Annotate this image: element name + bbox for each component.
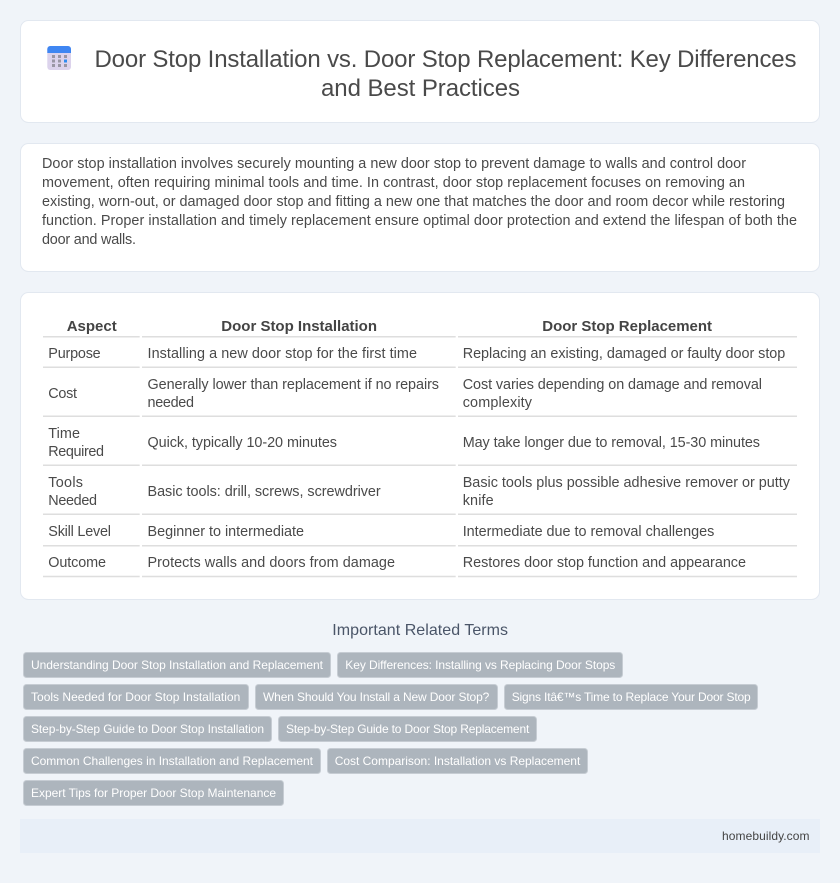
text block: intro: door and walls. (42, 232, 136, 248)
tag: Cost Comparison: Installation vs Replacement (335, 754, 581, 768)
table row: skill level: Skill Level (48, 524, 111, 540)
table row: time required: Time (48, 426, 80, 442)
heading: important related terms: Important Related Terms (332, 622, 508, 639)
table row: outcome: Protects walls and doors from damage (148, 555, 395, 571)
tag (24, 716, 272, 742)
tag: Signs Itâ€™s Time to Replace Your Door Stop (512, 690, 751, 704)
table row: outcome: Outcome (48, 555, 106, 571)
tag (24, 748, 320, 774)
tag: Key Differences: Installing vs Replacing Door Stops (345, 658, 615, 672)
tag (328, 748, 588, 774)
tag (256, 684, 498, 710)
tag (24, 780, 284, 806)
text block: intro (42, 156, 797, 248)
table row: tools needed: Basic tools plus possible adhesive remover or putty (463, 475, 791, 491)
text block: intro: existing, worn-out, or damaged door stop and fitting a new one that matches the door and room decor while restoring (42, 194, 785, 210)
table row: cost: Cost (48, 386, 77, 402)
tag (504, 684, 758, 710)
title (94, 46, 796, 102)
tag: When Should You Install a New Door Stop? (263, 690, 490, 704)
table row: outcome (48, 555, 746, 571)
table row: time required: May take longer due to removal, 15-30 minutes (463, 435, 760, 451)
table row: purpose (48, 346, 785, 362)
tag: Step-by-Step Guide to Door Stop Replacement (286, 722, 530, 736)
table row: outcome: Restores door stop function and appearance (463, 555, 746, 571)
table row: purpose: Installing a new door stop for the first time (148, 346, 417, 362)
tag: Tools Needed for Door Stop Installation (31, 690, 240, 704)
title: and Best Practices (321, 75, 520, 102)
table row: tools needed: Tools (48, 475, 83, 491)
table row: tools needed: Basic tools: drill, screws, screwdriver (148, 484, 381, 500)
table row: tools needed (48, 475, 791, 509)
table header: Aspect (67, 318, 117, 335)
tag (278, 716, 536, 742)
table row: cost: Generally lower than replacement if no repairs (148, 377, 439, 393)
icon: calendar (47, 46, 71, 70)
tag: Common Challenges in Installation and Replacement (31, 754, 314, 768)
table header (67, 318, 712, 335)
table row: cost: complexity (463, 395, 533, 411)
footer (20, 819, 820, 853)
footer: homebuildy.com (722, 829, 810, 843)
tag: Step-by-Step Guide to Door Stop Installation (31, 722, 264, 736)
text block: intro: function. Proper installation and timely replacement ensure optimal door protection and extend the lifespan of both the (42, 213, 797, 229)
title: Door Stop Installation vs. Door Stop Replacement: Key Differences (94, 46, 796, 73)
panel: header (20, 20, 820, 122)
table header: Door Stop Installation (221, 318, 377, 335)
table row: tools needed: knife (463, 493, 494, 509)
table row: time required: Required (48, 444, 104, 460)
text block: intro: movement, often requiring minimal tools and time. In contrast, door stop replacement focuses on removing an (42, 175, 745, 191)
text block: intro: Door stop installation involves securely mounting a new door stop to prevent damage to walls and control door (42, 156, 746, 172)
panel: comparison table (20, 292, 820, 600)
tag (24, 684, 248, 710)
table row: purpose: Replacing an existing, damaged or faulty door stop (463, 346, 785, 362)
table row: time required (48, 426, 760, 460)
table row: skill level (48, 524, 714, 540)
table header: Door Stop Replacement (542, 318, 712, 335)
table row: cost: Cost varies depending on damage and removal (463, 377, 762, 393)
table row: purpose: Purpose (48, 346, 101, 362)
table row: skill level: Intermediate due to removal challenges (463, 524, 714, 540)
tag: Understanding Door Stop Installation and Replacement (31, 658, 324, 672)
panel: intro paragraph (20, 144, 820, 272)
tag (338, 652, 622, 678)
tag: Expert Tips for Proper Door Stop Maintenance (31, 786, 276, 800)
table row: tools needed: Needed (48, 493, 97, 509)
table row: cost (48, 377, 762, 411)
tag (24, 652, 330, 678)
table row: time required: Quick, typically 10-20 minutes (148, 435, 337, 451)
table row: cost: needed (148, 395, 194, 411)
tag group: related terms (24, 652, 758, 806)
table row: skill level: Beginner to intermediate (148, 524, 304, 540)
